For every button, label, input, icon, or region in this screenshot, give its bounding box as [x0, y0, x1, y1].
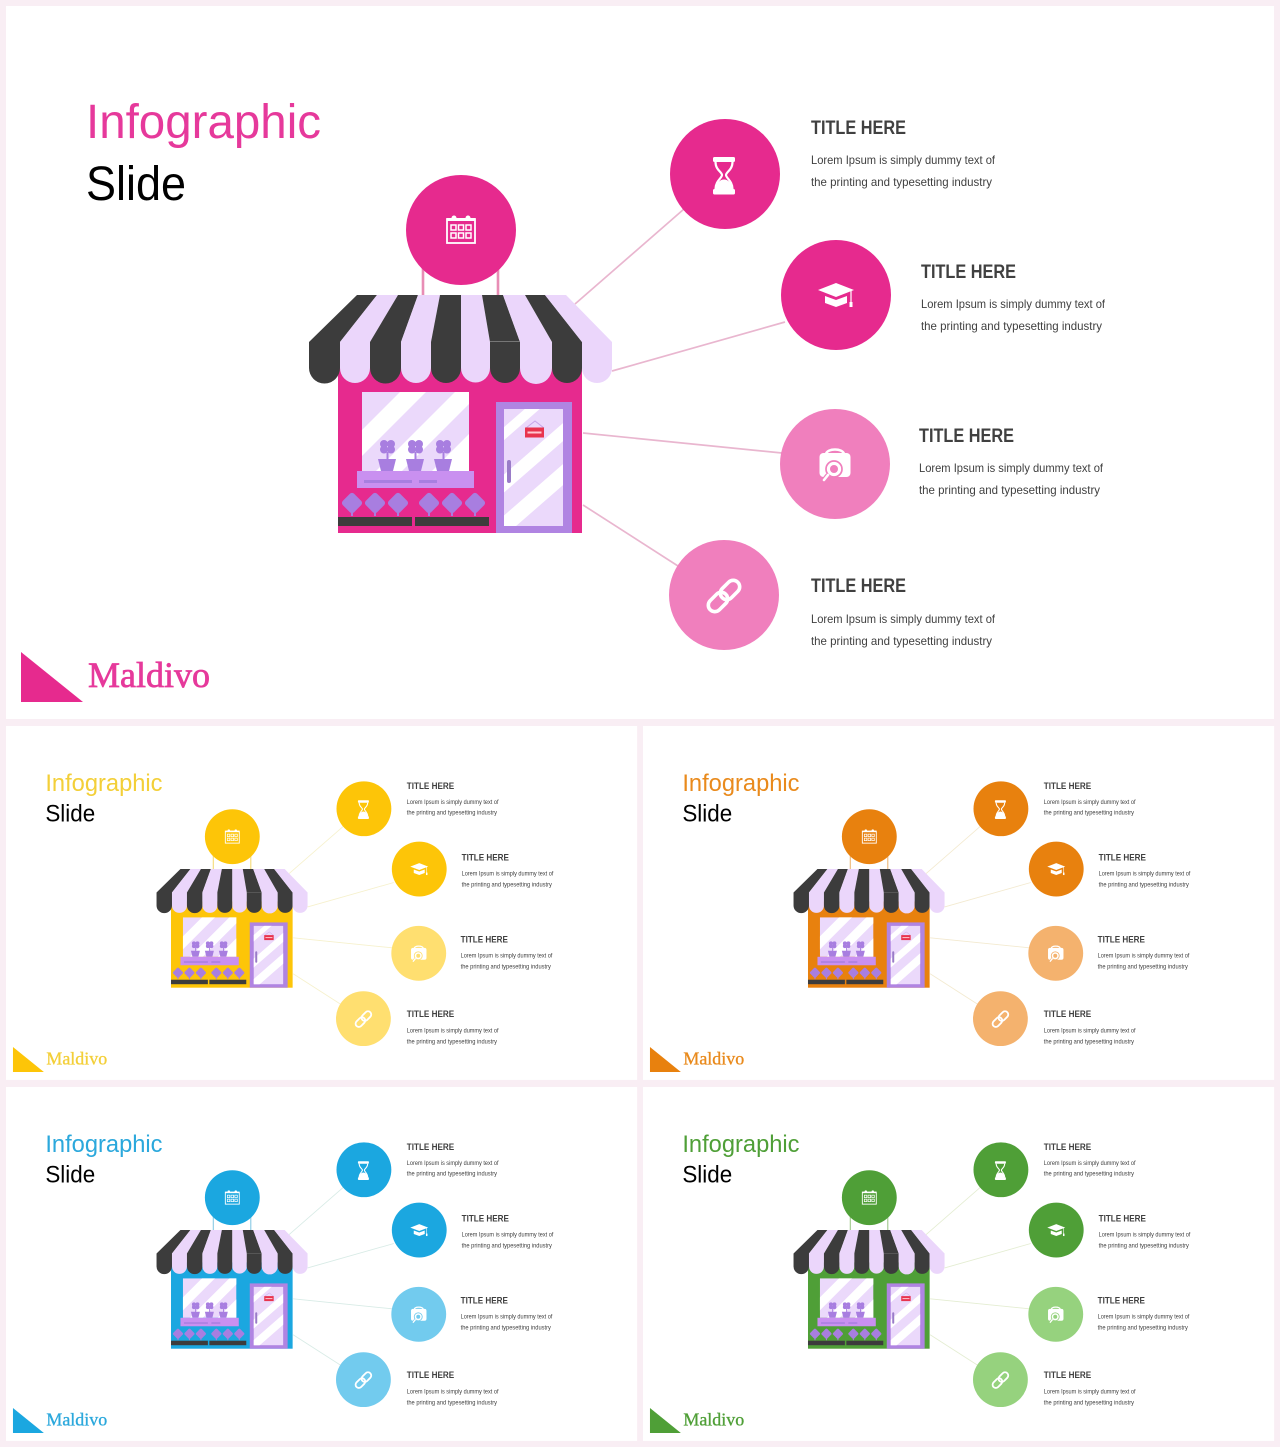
text block 1: TITLE HERE — [407, 1142, 454, 1153]
panel background — [6, 726, 637, 1080]
text block 3: Lorem Ipsum is simply dummy text of — [919, 461, 1104, 475]
diamond planters — [341, 492, 486, 516]
text block 2: the printing and typesetting industry — [1099, 1244, 1189, 1250]
text block 3: TITLE HERE — [1098, 1295, 1145, 1306]
icon: graduation cap — [1047, 1224, 1065, 1236]
text block 4: TITLE HERE — [1044, 1009, 1091, 1020]
shop illustration — [309, 295, 612, 540]
calendar posts — [423, 268, 498, 295]
text block 3: Lorem Ipsum is simply dummy text of — [461, 1314, 553, 1320]
text block 4: TITLE HERE — [811, 576, 906, 597]
icon: graduation cap — [410, 863, 428, 875]
text block 1: Lorem Ipsum is simply dummy text of — [1044, 800, 1136, 806]
circle: graduation cap — [1029, 842, 1084, 896]
shop door — [496, 370, 572, 540]
text block 4: the printing and typesetting industry — [811, 634, 992, 648]
text block 1: TITLE HERE — [407, 781, 454, 792]
circle: calendar — [205, 809, 260, 864]
icon: chain link — [991, 1010, 1010, 1028]
circle: chain link — [973, 1352, 1028, 1407]
icon: graduation cap — [1047, 863, 1065, 875]
text block 3 — [919, 426, 1104, 497]
icon: hourglass — [358, 1161, 369, 1180]
text block 1 — [811, 118, 996, 189]
logo: Maldivo — [683, 1048, 744, 1068]
title: Slide — [682, 1162, 732, 1189]
circle: hourglass — [670, 119, 780, 229]
icon: chain link — [991, 1371, 1010, 1389]
icon: calendar — [447, 216, 475, 243]
text block 1: TITLE HERE — [811, 118, 906, 139]
text block 3: the printing and typesetting industry — [1098, 1325, 1188, 1331]
icon: chain link — [354, 1010, 373, 1028]
logo — [13, 1047, 107, 1072]
text block 2: Lorem Ipsum is simply dummy text of — [921, 297, 1106, 311]
icon: camera search — [820, 450, 850, 480]
calendar posts — [850, 856, 888, 869]
text block 4: the printing and typesetting industry — [407, 1401, 497, 1407]
text block 3: TITLE HERE — [461, 934, 508, 945]
text block 2: the printing and typesetting industry — [462, 883, 552, 889]
text block 1: TITLE HERE — [1044, 781, 1091, 792]
text block 2 — [921, 262, 1106, 333]
text block 3: TITLE HERE — [1098, 934, 1145, 945]
text block 2 — [1099, 853, 1191, 889]
title — [86, 96, 321, 211]
text block 4: TITLE HERE — [407, 1370, 454, 1381]
text block 2: the printing and typesetting industry — [921, 319, 1102, 333]
icon: graduation cap — [410, 1224, 428, 1236]
icon: camera search — [411, 1307, 426, 1322]
title: Slide — [45, 1162, 95, 1189]
text block 2: TITLE HERE — [1099, 1214, 1146, 1225]
title: Infographic — [45, 770, 163, 797]
text block 2: TITLE HERE — [1099, 853, 1146, 864]
connector lines — [926, 1187, 1031, 1365]
text block 2: the printing and typesetting industry — [1099, 883, 1189, 889]
connector lines — [575, 209, 785, 566]
title: Slide — [45, 801, 95, 828]
text block 4: Lorem Ipsum is simply dummy text of — [1044, 1029, 1136, 1035]
text block 1 — [1044, 1142, 1136, 1178]
icon: camera search — [1048, 1307, 1063, 1322]
icon: camera search — [1048, 946, 1063, 961]
text block 1: the printing and typesetting industry — [1044, 1172, 1134, 1178]
text block 1: the printing and typesetting industry — [407, 1172, 497, 1178]
title — [45, 1131, 163, 1189]
connector lines — [289, 1187, 394, 1365]
text block 4: TITLE HERE — [1044, 1370, 1091, 1381]
circle: chain link — [669, 540, 779, 650]
circle: calendar — [842, 1170, 897, 1225]
text block 3 — [1098, 934, 1190, 970]
circle: graduation cap — [392, 842, 447, 896]
icon: calendar — [225, 1190, 239, 1204]
slide: blue — [6, 1087, 637, 1441]
text block 3: the printing and typesetting industry — [919, 483, 1100, 497]
text block 4: Lorem Ipsum is simply dummy text of — [407, 1029, 499, 1035]
panel background — [6, 1087, 637, 1441]
text block 2: TITLE HERE — [921, 262, 1016, 283]
slide: orange — [643, 726, 1274, 1080]
text block 4: the printing and typesetting industry — [1044, 1040, 1134, 1046]
shop building — [338, 360, 582, 533]
text block 1: Lorem Ipsum is simply dummy text of — [407, 800, 499, 806]
shop window — [312, 380, 580, 480]
text block 1: Lorem Ipsum is simply dummy text of — [811, 153, 996, 167]
panel background — [643, 1087, 1274, 1441]
text block 1: TITLE HERE — [1044, 1142, 1091, 1153]
text block 3: Lorem Ipsum is simply dummy text of — [461, 953, 553, 959]
logo: Maldivo — [46, 1409, 107, 1429]
text block 3: Lorem Ipsum is simply dummy text of — [1098, 1314, 1190, 1320]
circle: chain link — [336, 991, 391, 1046]
shop illustration — [794, 1230, 945, 1352]
title: Infographic — [86, 96, 321, 149]
text block 2: the printing and typesetting industry — [462, 1244, 552, 1250]
logo: Maldivo — [46, 1048, 107, 1068]
text block 3: Lorem Ipsum is simply dummy text of — [1098, 953, 1190, 959]
circle: chain link — [336, 1352, 391, 1407]
title: Slide — [682, 801, 732, 828]
icon: hourglass — [995, 1161, 1006, 1180]
slide: pink main — [6, 6, 1274, 719]
text block 3: TITLE HERE — [919, 426, 1014, 447]
window plants — [378, 440, 452, 471]
calendar posts — [213, 856, 251, 869]
title: Infographic — [682, 1131, 800, 1158]
text block 4 — [407, 1370, 499, 1407]
text block 4 — [407, 1009, 499, 1046]
slide: yellow — [6, 726, 637, 1080]
text block 1 — [1044, 781, 1136, 817]
text block 2 — [462, 853, 554, 889]
icon: calendar — [225, 829, 239, 843]
text block 1: the printing and typesetting industry — [811, 175, 992, 189]
text block 1 — [407, 781, 499, 817]
text block 2: TITLE HERE — [462, 853, 509, 864]
title — [682, 770, 800, 828]
text block 4 — [1044, 1370, 1136, 1407]
text block 4 — [811, 576, 996, 648]
planter boxes — [338, 517, 489, 526]
circle: hourglass — [336, 1142, 391, 1197]
text block 1 — [407, 1142, 499, 1178]
title — [682, 1131, 800, 1189]
title: Infographic — [45, 1131, 163, 1158]
icon: chain link — [354, 1371, 373, 1389]
text block 3: the printing and typesetting industry — [461, 1325, 551, 1331]
text block 4: Lorem Ipsum is simply dummy text of — [811, 612, 996, 626]
icon: hourglass — [713, 157, 735, 194]
icon: calendar — [862, 829, 876, 843]
icon: graduation cap — [818, 283, 854, 307]
text block 3: the printing and typesetting industry — [461, 964, 551, 970]
circle: calendar — [406, 175, 516, 285]
text block 3: the printing and typesetting industry — [1098, 964, 1188, 970]
circle: graduation cap — [1029, 1203, 1084, 1257]
circle: camera search — [780, 409, 890, 519]
text block 4: Lorem Ipsum is simply dummy text of — [407, 1390, 499, 1396]
circle: calendar — [205, 1170, 260, 1225]
shop illustration — [157, 1230, 308, 1352]
text block 3 — [461, 1295, 553, 1331]
icon: hourglass — [358, 800, 369, 819]
shop illustration — [794, 869, 945, 991]
circle: hourglass — [336, 781, 391, 836]
text block 4: Lorem Ipsum is simply dummy text of — [1044, 1390, 1136, 1396]
title — [45, 770, 163, 828]
logo — [650, 1047, 744, 1072]
circle: graduation cap — [392, 1203, 447, 1257]
text block 4: the printing and typesetting industry — [407, 1040, 497, 1046]
text block 2 — [462, 1214, 554, 1250]
icon: calendar — [862, 1190, 876, 1204]
calendar posts — [213, 1217, 251, 1230]
panel background — [643, 726, 1274, 1080]
circle: hourglass — [973, 781, 1028, 836]
connector lines — [926, 826, 1031, 1004]
circle: camera search — [391, 1287, 446, 1342]
text block 3: TITLE HERE — [461, 1295, 508, 1306]
logo — [21, 652, 210, 702]
circle: graduation cap — [781, 240, 891, 350]
text block 2: Lorem Ipsum is simply dummy text of — [1099, 1233, 1191, 1239]
connector lines — [289, 826, 394, 1004]
circle: chain link — [973, 991, 1028, 1046]
text block 3 — [1098, 1295, 1190, 1331]
circle: camera search — [1028, 1287, 1083, 1342]
window sill — [357, 471, 474, 488]
icon: hourglass — [995, 800, 1006, 819]
text block 1: the printing and typesetting industry — [407, 811, 497, 817]
text block 1: the printing and typesetting industry — [1044, 811, 1134, 817]
text block 4: the printing and typesetting industry — [1044, 1401, 1134, 1407]
circle: hourglass — [973, 1142, 1028, 1197]
shop illustration — [157, 869, 308, 991]
circle: camera search — [391, 926, 446, 981]
icon: chain link — [706, 578, 742, 614]
text block 1: Lorem Ipsum is simply dummy text of — [1044, 1161, 1136, 1167]
text block 2: TITLE HERE — [462, 1214, 509, 1225]
text block 2 — [1099, 1214, 1191, 1250]
circle: camera search — [1028, 926, 1083, 981]
logo — [13, 1408, 107, 1433]
title: Slide — [86, 158, 186, 211]
title: Infographic — [682, 770, 800, 797]
text block 2: Lorem Ipsum is simply dummy text of — [462, 872, 554, 878]
logo: Maldivo — [88, 655, 210, 695]
text block 1: Lorem Ipsum is simply dummy text of — [407, 1161, 499, 1167]
logo — [650, 1408, 744, 1433]
text block 2: Lorem Ipsum is simply dummy text of — [462, 1233, 554, 1239]
logo: Maldivo — [683, 1409, 744, 1429]
slide: green — [643, 1087, 1274, 1441]
circle: calendar — [842, 809, 897, 864]
awning — [309, 295, 612, 384]
text block 2: Lorem Ipsum is simply dummy text of — [1099, 872, 1191, 878]
panel background — [6, 6, 1274, 719]
text block 3 — [461, 934, 553, 970]
calendar posts — [850, 1217, 888, 1230]
icon: camera search — [411, 946, 426, 961]
text block 4: TITLE HERE — [407, 1009, 454, 1020]
text block 4 — [1044, 1009, 1136, 1046]
